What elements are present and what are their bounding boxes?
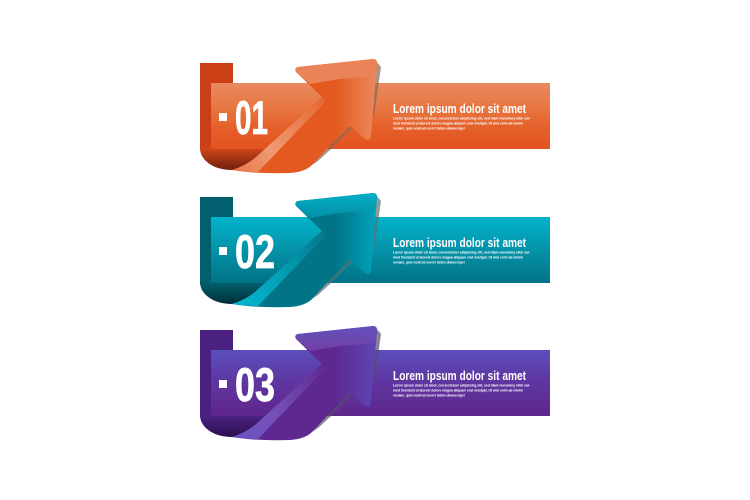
step text: veniam, quis nostrud exerci tation ullamcorper — [393, 394, 465, 398]
step text: veniam, quis nostrud exerci tation ullamcorper — [393, 260, 465, 264]
banner — [211, 217, 550, 283]
arrow — [232, 326, 377, 440]
curl shadow — [200, 415, 280, 437]
step text — [393, 236, 531, 264]
step text: mod tincidunt ut laoreet dolore magna aliquam erat volutpat. Ut wisi enim ad minim — [393, 388, 524, 392]
curl shadow — [200, 282, 280, 304]
step text: mod tincidunt ut laoreet dolore magna aliquam erat volutpat. Ut wisi enim ad minim — [393, 121, 524, 125]
step text — [393, 369, 531, 398]
banner — [211, 350, 550, 416]
step number: 03 — [235, 358, 275, 411]
step text: Lorem ipsum dolor sit amet — [393, 102, 527, 116]
curl shadow — [200, 148, 280, 170]
step text: Lorem ipsum dolor sit amet, consectetuer adipiscing elit, sed diam nonummy nibh eui- — [393, 250, 531, 254]
step number: 02 — [235, 225, 275, 278]
step text: mod tincidunt ut laoreet dolore magna aliquam erat volutpat. Ut wisi enim ad minim — [393, 255, 524, 259]
arrow shadow — [312, 61, 381, 165]
arrow — [232, 59, 377, 173]
folded dark tab — [200, 330, 233, 417]
panel: step 02 teal — [200, 193, 550, 307]
step text: Lorem ipsum dolor sit amet, consectetuer adipiscing elit, sed diam nonummy nibh eui- — [393, 384, 531, 388]
folded dark tab — [200, 197, 233, 284]
step text: Lorem ipsum dolor sit amet — [393, 369, 527, 383]
step number: 01 — [235, 91, 268, 144]
folded dark tab — [200, 63, 233, 150]
step number — [219, 225, 275, 278]
arrow shadow — [312, 195, 381, 299]
step number — [219, 91, 268, 144]
panel: step 03 purple — [200, 326, 550, 440]
step text: Lorem ipsum dolor sit amet — [393, 236, 527, 250]
step text — [393, 102, 531, 130]
step text: veniam, quis nostrud exerci tation ullamcorper — [393, 126, 465, 130]
banner — [211, 83, 550, 149]
arrow — [232, 193, 377, 307]
step number — [219, 358, 275, 411]
panel: step 01 orange — [200, 59, 550, 173]
arrow shadow — [312, 328, 381, 432]
step text: Lorem ipsum dolor sit amet, consectetuer adipiscing elit, sed diam nonummy nibh eui- — [393, 116, 531, 120]
